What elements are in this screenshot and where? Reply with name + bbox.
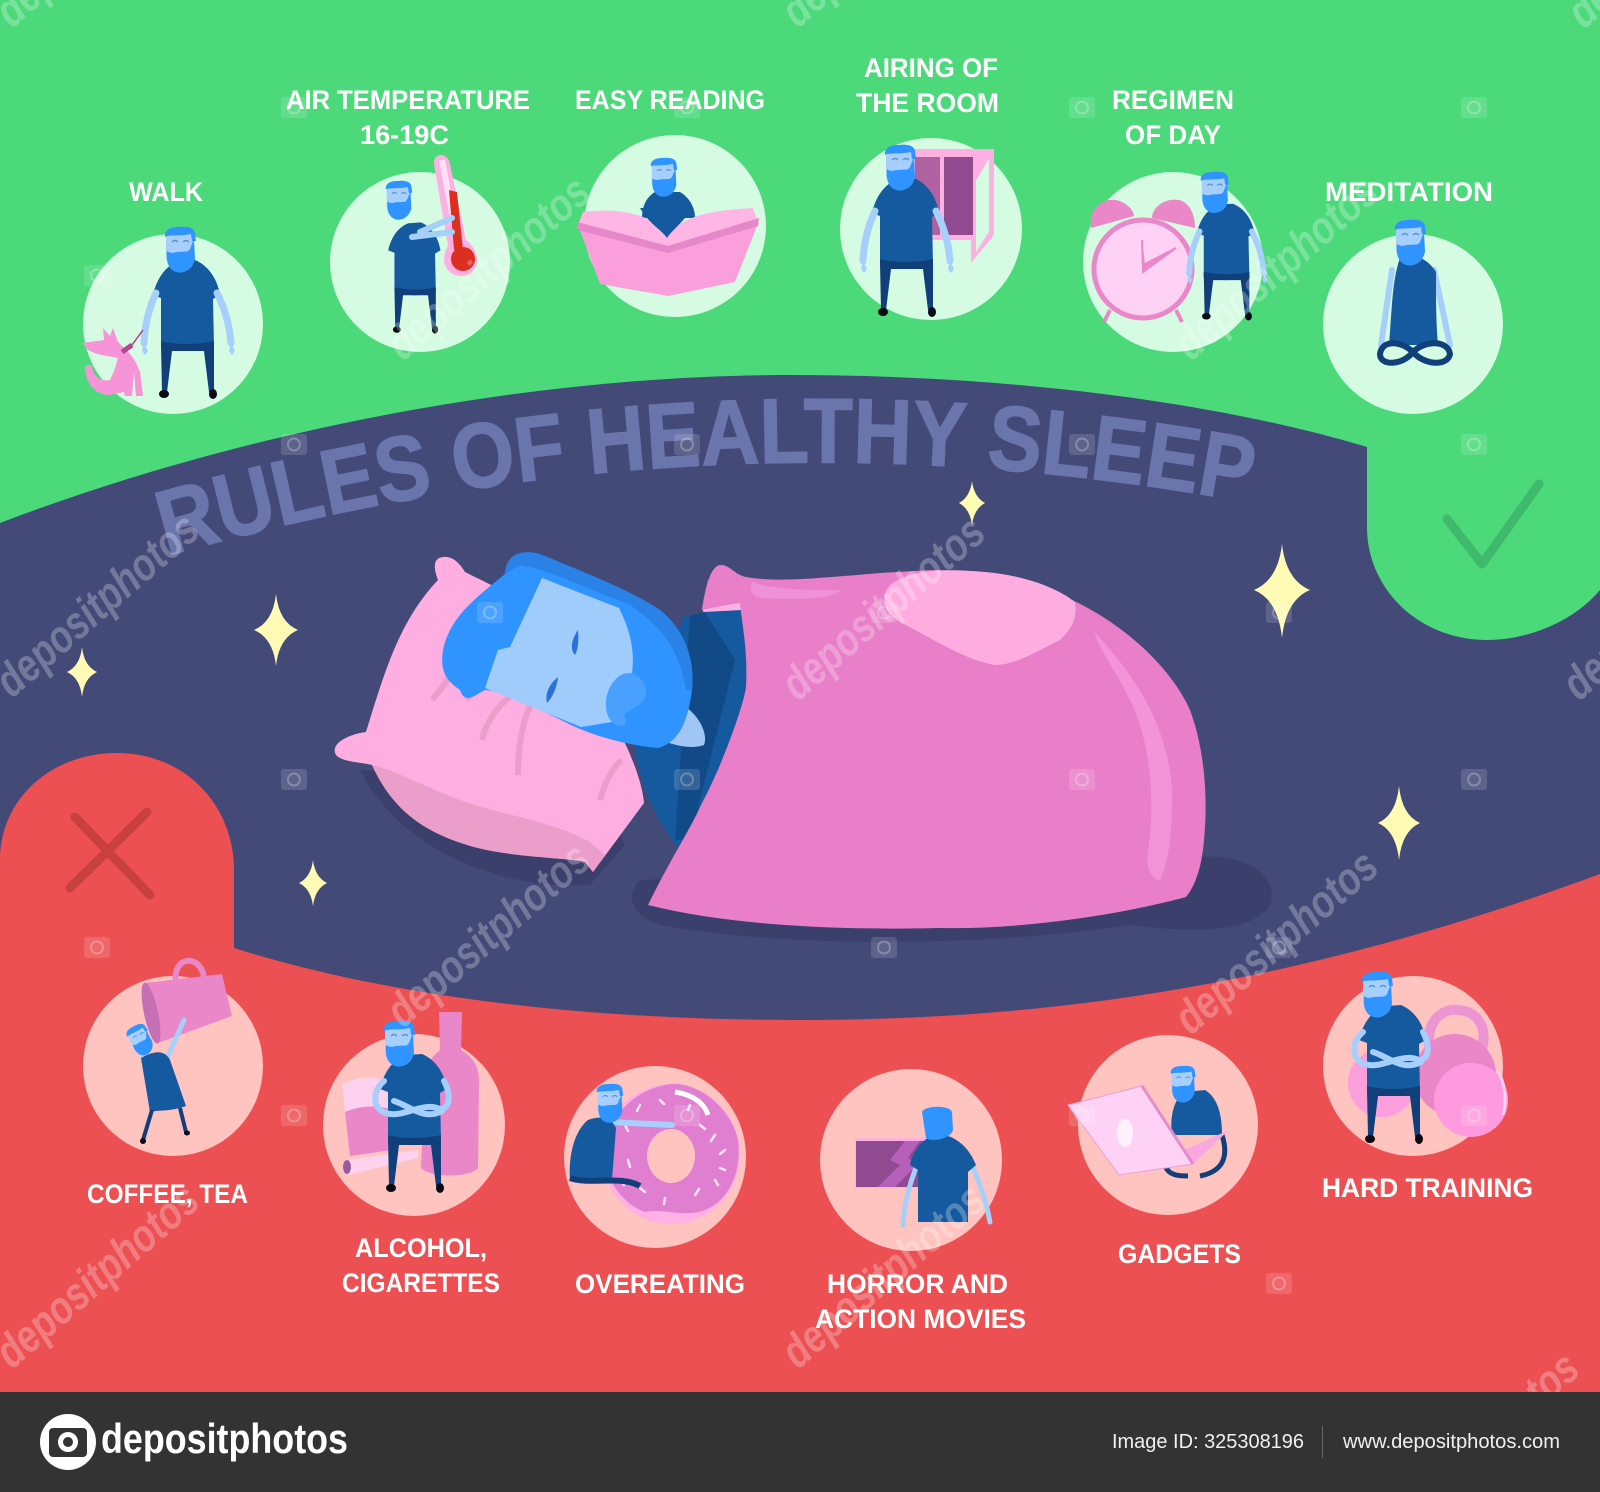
circle bbox=[584, 135, 766, 317]
pillow bbox=[335, 557, 644, 872]
scene: gadgets bbox=[1068, 1035, 1258, 1269]
label bbox=[815, 1269, 1026, 1334]
circle bbox=[1323, 976, 1503, 1156]
check mark bbox=[1447, 484, 1539, 564]
scene: regimen of day bbox=[1083, 85, 1267, 352]
label: THE ROOM bbox=[856, 88, 999, 118]
label: ALCOHOL, bbox=[355, 1233, 487, 1263]
logo wordmark: depositphotos bbox=[101, 1415, 348, 1462]
man bbox=[1187, 172, 1267, 320]
logo icon bbox=[40, 1414, 96, 1470]
alarm clock bbox=[1091, 200, 1195, 322]
tv bbox=[855, 1138, 927, 1188]
circle bbox=[840, 138, 1022, 320]
hair and head bbox=[442, 552, 693, 748]
watermark camera icons bbox=[84, 97, 1487, 1294]
bottle bbox=[421, 1012, 479, 1176]
blanket bbox=[648, 565, 1206, 929]
circle bbox=[83, 976, 263, 1156]
window bbox=[912, 149, 994, 263]
donut bbox=[602, 1084, 740, 1224]
watermark texts: depositphotos bbox=[1163, 839, 1388, 1044]
label: HARD TRAINING bbox=[1322, 1173, 1533, 1203]
eyes bbox=[546, 630, 578, 703]
label: 16-19C bbox=[360, 120, 449, 150]
man with dog bbox=[82, 227, 235, 399]
kettlebells bbox=[1348, 1010, 1508, 1137]
scene: alcohol, cigarettes bbox=[323, 1012, 505, 1298]
label: MEDITATION bbox=[1325, 177, 1493, 207]
watermark texts: depositphotos bbox=[375, 832, 600, 1037]
man bbox=[1165, 1066, 1225, 1176]
man bbox=[642, 158, 695, 218]
watermark texts: depositphotos bbox=[1163, 165, 1388, 370]
circle bbox=[1323, 234, 1503, 414]
label: OF DAY bbox=[1125, 120, 1221, 150]
footer bar bbox=[0, 1392, 1600, 1492]
label: AIRING OF bbox=[864, 53, 998, 83]
scene: airing of the room bbox=[840, 53, 1022, 320]
man bbox=[1354, 972, 1428, 1144]
image id: Image ID: 325308196 bbox=[1112, 1431, 1304, 1453]
book bbox=[577, 208, 759, 296]
scene: air temperature bbox=[286, 85, 530, 352]
label: WALK bbox=[129, 177, 203, 207]
label: REGIMEN bbox=[1112, 85, 1234, 115]
scene: overeating bbox=[564, 1066, 746, 1299]
pillow shadow bbox=[360, 770, 625, 885]
blanket shadow bbox=[632, 857, 1272, 942]
sleeping man illustration bbox=[335, 552, 1272, 942]
circle bbox=[564, 1066, 746, 1248]
green top background bbox=[0, 0, 1600, 760]
man bbox=[570, 1084, 672, 1186]
title: rules of healthy sleep: RULES OF HEALTHY SLEEP bbox=[154, 398, 1254, 556]
glass bbox=[342, 1078, 392, 1156]
scene: walk bbox=[82, 177, 263, 414]
man bbox=[375, 1021, 449, 1193]
cigarette bbox=[343, 1150, 418, 1175]
scene: horror and action movies bbox=[815, 1069, 1026, 1334]
scene: coffee, tea bbox=[83, 961, 263, 1209]
circle bbox=[1078, 1035, 1258, 1215]
circle bbox=[323, 1034, 505, 1216]
red bottom background bbox=[0, 753, 1600, 1392]
shirt bbox=[635, 603, 750, 850]
divider bbox=[1322, 1426, 1323, 1458]
cross mark bbox=[70, 812, 150, 895]
label: GADGETS bbox=[1118, 1239, 1241, 1269]
circle bbox=[1083, 172, 1263, 352]
green check corner blob bbox=[1367, 440, 1600, 640]
man bbox=[386, 181, 452, 334]
label: EASY READING bbox=[575, 85, 765, 115]
scene: hard training bbox=[1322, 972, 1533, 1203]
laptop bbox=[1068, 1086, 1229, 1175]
man bbox=[124, 1020, 190, 1144]
label: ACTION MOVIES bbox=[815, 1304, 1026, 1334]
label: OVEREATING bbox=[575, 1269, 745, 1299]
watermark texts: depositphotos bbox=[375, 165, 600, 370]
shoulder bbox=[650, 700, 705, 747]
face bbox=[485, 578, 633, 727]
label bbox=[342, 1233, 500, 1298]
thermometer bbox=[434, 155, 477, 276]
circle bbox=[83, 234, 263, 414]
watermark texts: depositphotos bbox=[770, 505, 995, 710]
label: AIR TEMPERATURE bbox=[286, 85, 530, 115]
website: www.depositphotos.com bbox=[1342, 1431, 1560, 1453]
circle bbox=[820, 1069, 1002, 1251]
man from back bbox=[903, 1107, 990, 1225]
label: COFFEE, TEA bbox=[87, 1179, 248, 1209]
ear bbox=[606, 673, 646, 726]
man bbox=[861, 145, 954, 317]
label bbox=[286, 85, 530, 150]
label bbox=[1112, 85, 1234, 150]
dark navy central band bbox=[0, 375, 1600, 1100]
circle bbox=[330, 172, 510, 352]
stars bbox=[67, 481, 1420, 906]
label: HORROR AND bbox=[827, 1269, 1008, 1299]
mug bbox=[138, 961, 232, 1045]
label: CIGARETTES bbox=[342, 1268, 500, 1298]
scene: meditation bbox=[1323, 177, 1503, 414]
meditating man bbox=[1380, 220, 1450, 363]
watermark texts: depositphotos bbox=[770, 1173, 995, 1378]
scene: easy reading bbox=[575, 85, 766, 317]
label bbox=[856, 53, 999, 118]
